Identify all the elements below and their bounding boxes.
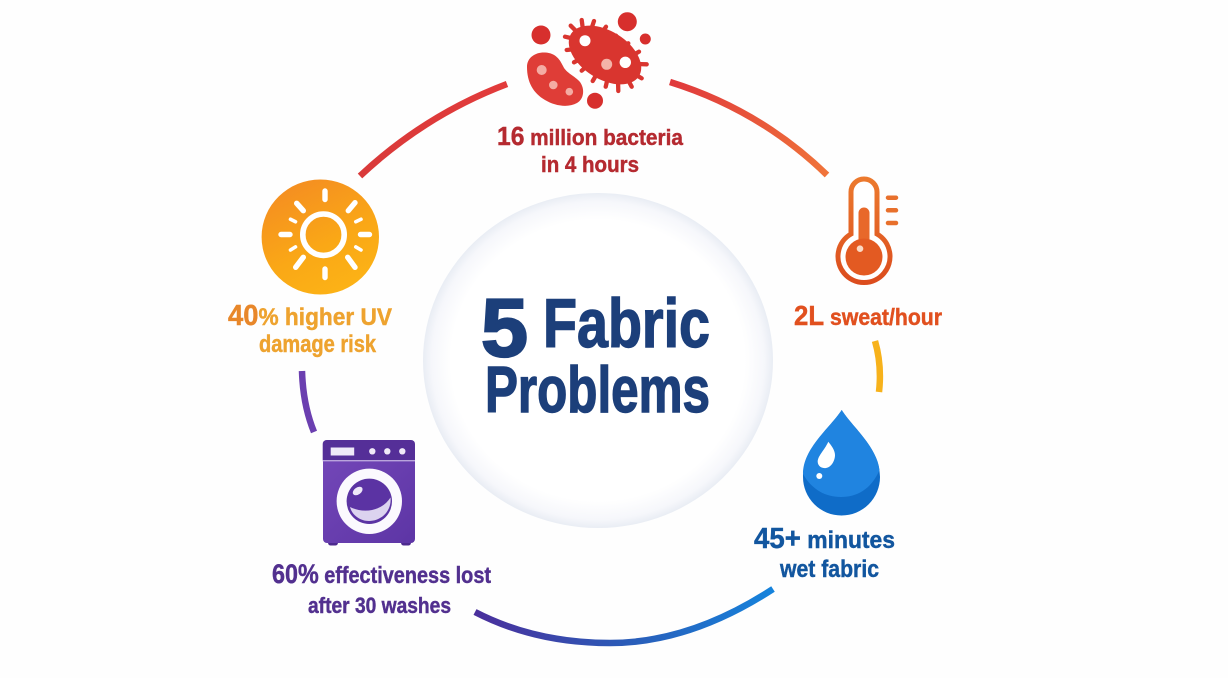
sun disc bbox=[262, 180, 379, 294]
spiky bacterium bbox=[558, 13, 652, 97]
arc: drop to washer bbox=[475, 589, 773, 643]
arc: thermometer to drop bbox=[875, 341, 880, 392]
label line one: 45+ minutes bbox=[754, 523, 895, 555]
washer body bbox=[323, 455, 415, 543]
arc: washer to sun bbox=[302, 371, 314, 432]
arc: bacteria to thermometer bbox=[670, 82, 827, 175]
title word Problems: Problems bbox=[485, 353, 710, 426]
buttons bbox=[369, 448, 375, 454]
bean bacterium bbox=[527, 52, 583, 106]
sun short rays bbox=[290, 219, 361, 250]
label: UV damage bbox=[228, 300, 392, 358]
icon: sun bbox=[262, 180, 379, 294]
icon: water drop bbox=[803, 410, 880, 516]
temperature ticks bbox=[888, 198, 896, 223]
arc: sun to bacteria bbox=[360, 84, 507, 176]
label text: 2L sweat/hour bbox=[794, 300, 942, 331]
sun ring bbox=[303, 214, 344, 255]
icon: thermometer bbox=[838, 179, 896, 283]
title number 5: 5 bbox=[481, 281, 528, 374]
sun long rays bbox=[281, 191, 370, 278]
title bbox=[481, 281, 710, 426]
drop body bbox=[803, 410, 880, 516]
label line one: 60% effectiveness lost bbox=[272, 559, 491, 589]
label: wet fabric bbox=[754, 523, 895, 583]
label line two: damage risk bbox=[259, 331, 377, 358]
floating spores bbox=[532, 12, 651, 109]
label line one: 40% higher UV bbox=[228, 300, 392, 332]
icon: washing machine bbox=[323, 440, 415, 546]
thermometer outline bbox=[838, 179, 890, 283]
icon: bacteria bbox=[527, 12, 652, 109]
label line two: wet fabric bbox=[779, 556, 879, 583]
label: washes bbox=[272, 559, 491, 618]
display bbox=[331, 448, 354, 456]
mercury column bbox=[858, 208, 870, 248]
label: bacteria bbox=[497, 121, 684, 177]
label line two: in 4 hours bbox=[541, 152, 639, 177]
ring of arc segments bbox=[302, 82, 880, 643]
drop lighter face bbox=[803, 410, 880, 497]
washer control panel bbox=[323, 440, 415, 460]
label line two: after 30 washes bbox=[308, 593, 451, 618]
washer door bbox=[337, 469, 402, 534]
label line one: 16 million bacteria bbox=[497, 121, 684, 151]
washer feet bbox=[328, 540, 338, 546]
title word Fabric: Fabric bbox=[543, 285, 710, 362]
door water bbox=[350, 498, 391, 521]
drop highlight bbox=[818, 442, 835, 468]
door glint bbox=[351, 485, 364, 497]
panel: central circle bbox=[423, 193, 773, 528]
